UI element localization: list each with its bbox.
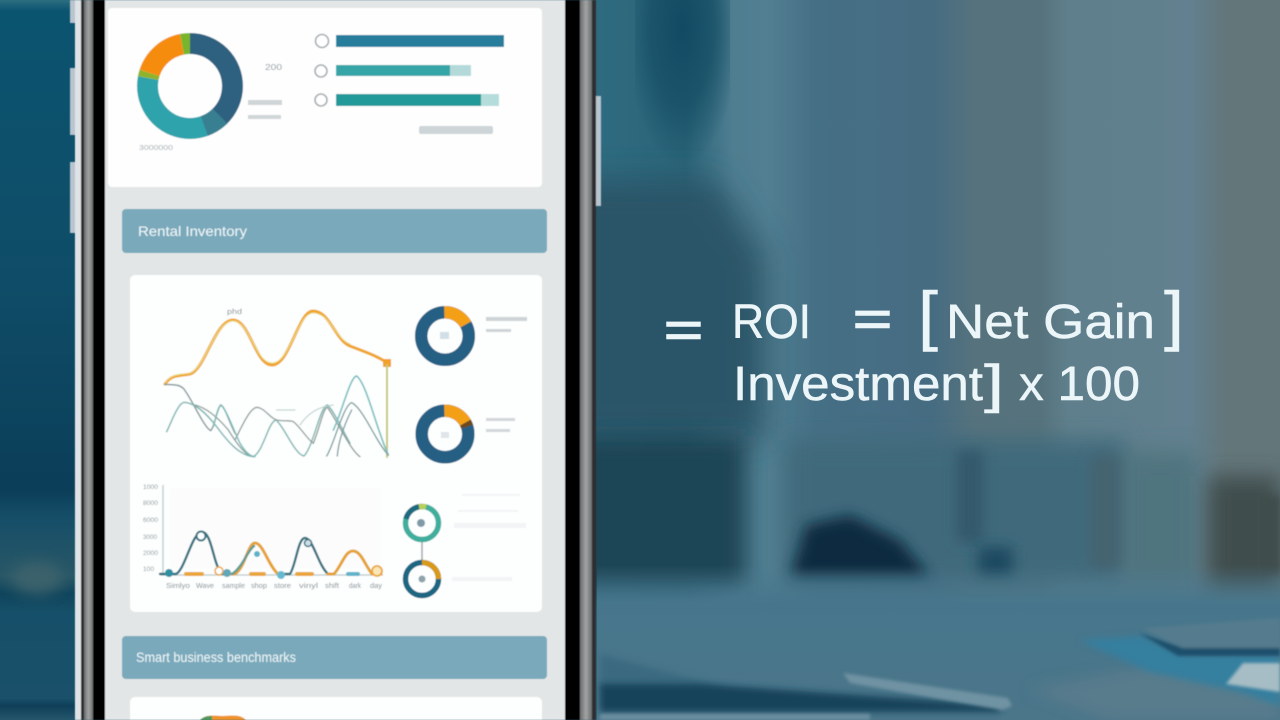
x axis labels: shift [325, 583, 339, 590]
y axis labels: 1000 [143, 485, 159, 491]
donut: upper right centre [440, 332, 449, 339]
panel: bottom card with cropped donut [130, 697, 542, 720]
y axis labels: 100 [143, 567, 155, 573]
second equals sign: = [853, 291, 892, 347]
donut labels: 200 [265, 63, 283, 72]
donut: lower right centre [441, 432, 449, 438]
x axis labels: vinyl [299, 583, 319, 590]
x axis labels: day [370, 583, 383, 590]
progress bar row 1 [316, 34, 504, 48]
x axis labels: store [274, 583, 291, 590]
phone frame [75, 0, 596, 720]
donut labels [139, 63, 283, 152]
progress bar row 3 [315, 94, 499, 106]
faint ring legends [452, 494, 526, 581]
closing bracket: ] [1164, 278, 1184, 352]
y axis labels: 3000 [143, 535, 158, 541]
heading bar: second section: Smart business benchmarks [136, 649, 296, 665]
panel: top summary card [108, 8, 542, 187]
chart grid [170, 488, 380, 568]
y axis labels: 6000 [143, 518, 159, 524]
legend placeholder bar [419, 126, 493, 134]
phone side buttons [70, 0, 601, 233]
donut: lower right [422, 411, 468, 457]
formula term: Investment: Investment [733, 358, 983, 411]
leading equals sign: = [664, 302, 703, 358]
formula label: ROI: ROI [732, 296, 811, 349]
peak markers [165, 532, 382, 579]
panel: charts card [130, 275, 542, 612]
x axis labels: Wave [196, 583, 214, 590]
x axis labels: sample [222, 583, 245, 590]
phone [70, 0, 601, 720]
y axis and baseline [161, 485, 383, 575]
line chart: orange and teal curves [165, 309, 391, 457]
y axis labels: 8000 [143, 501, 159, 507]
legend: lower right donut [486, 418, 515, 432]
phone screen [105, 0, 565, 720]
y axis labels: 2000 [143, 551, 159, 557]
heading bar: first section: Rental Inventory [138, 223, 247, 239]
legend: upper right donut [486, 317, 527, 332]
peak lines [160, 532, 381, 574]
y axis labels [143, 485, 159, 573]
closing bracket, second line: ] [984, 355, 1004, 414]
progress bar row 2 [315, 65, 471, 77]
x axis labels: Simlyo [166, 583, 190, 590]
opening bracket: [ [918, 278, 938, 352]
ROI formula [664, 278, 1184, 414]
peaks chart [143, 485, 383, 590]
donut labels: 3000000 [139, 145, 173, 152]
x axis labels: dark [349, 583, 361, 590]
x axis labels: shop [251, 583, 267, 590]
heading bar: second section [122, 636, 547, 679]
donut: upper right [421, 312, 469, 360]
linked ring pair [406, 506, 438, 596]
donut chart [148, 44, 232, 128]
line chart: orange and teal curves: phd [227, 309, 242, 316]
formula term: Net Gain: Net Gain [946, 296, 1155, 349]
x axis labels [166, 583, 383, 590]
heading bar: first section [122, 209, 547, 253]
multiplier: x 100 [1019, 358, 1140, 411]
